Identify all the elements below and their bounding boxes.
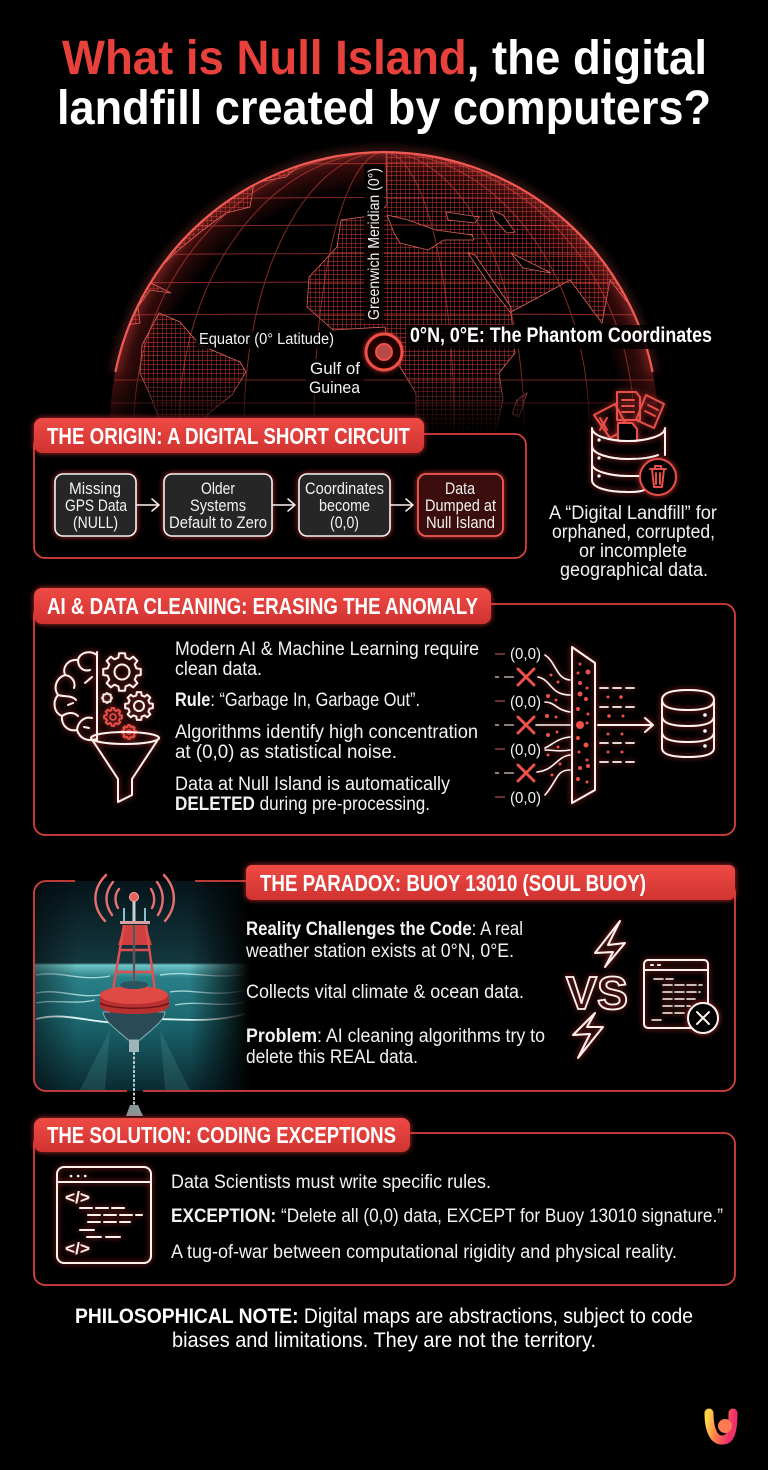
flow step 3 bbox=[299, 474, 390, 536]
null island target bbox=[366, 334, 402, 370]
text: paradox explanation: weather station exists at 0°N, 0°E. bbox=[245, 941, 514, 962]
heading: AI and data cleaning: AI & DATA CLEANING: ERASING THE ANOMALY bbox=[47, 593, 478, 619]
diagram: filter removing (0,0) points: (0,0) bbox=[510, 790, 541, 807]
heading: AI and data cleaning bbox=[34, 588, 491, 624]
text: AI cleaning explanation: DELETED during pre-processing. bbox=[175, 794, 430, 815]
panel: the solution bbox=[34, 1118, 735, 1285]
text: digital landfill description: A “Digital Landfill” for bbox=[549, 503, 718, 524]
flow step 4: Null Island bbox=[426, 513, 495, 532]
text: AI cleaning explanation: Rule: “Garbage In, Garbage Out”. bbox=[175, 690, 420, 711]
continents mesh bbox=[130, 153, 628, 432]
text: paradox explanation: delete this REAL data. bbox=[246, 1047, 418, 1068]
philosophical note: PHILOSOPHICAL NOTE: Digital maps are abstractions, subject to code bbox=[75, 1305, 693, 1328]
flow step 4: Data bbox=[445, 479, 475, 498]
illustration: soul buoy at sea bbox=[34, 875, 250, 1116]
diagram: filter removing (0,0) points: (0,0) bbox=[510, 646, 541, 663]
signal waves bbox=[95, 875, 174, 921]
flow step 1: GPS Data bbox=[65, 496, 127, 515]
graticule bbox=[111, 153, 657, 430]
arrow 3 bbox=[391, 499, 413, 511]
label: gulf of guinea: Guinea bbox=[309, 378, 360, 397]
panel: the paradox bbox=[34, 865, 735, 1116]
flow step 4 bbox=[418, 474, 503, 536]
icon: VS with lightning bolts: VS bbox=[566, 967, 628, 1019]
flow step 1: (NULL) bbox=[73, 513, 118, 532]
text: AI cleaning explanation: Algorithms identify high concentration bbox=[175, 722, 478, 743]
text: AI cleaning explanation: clean data. bbox=[175, 659, 262, 680]
icon: brain gears funnel bbox=[55, 652, 159, 802]
label: equator: Equator (0° Latitude) bbox=[199, 331, 334, 348]
diagram: filter removing (0,0) points: (0,0) bbox=[510, 694, 541, 711]
flow step 4: Dumped at bbox=[425, 496, 496, 515]
flow step 1: Missing bbox=[69, 479, 121, 498]
label: phantom coordinates: 0°N, 0°E: The Phantom Coordinates bbox=[410, 324, 712, 347]
text: solution explanation: A tug-of-war between computational rigidity and physical reality. bbox=[171, 1242, 677, 1263]
text: AI cleaning explanation bbox=[175, 639, 479, 815]
text: solution explanation bbox=[171, 1172, 723, 1263]
heading: the paradox: THE PARADOX: BUOY 13010 (SOUL BUOY) bbox=[260, 870, 646, 896]
globe with coordinate grid bbox=[108, 143, 660, 432]
text: digital landfill description bbox=[549, 503, 718, 581]
text: paradox explanation: Reality Challenges the Code: A real bbox=[246, 919, 523, 940]
text: digital landfill description: or incomplete bbox=[579, 541, 687, 562]
icon: code window: </> bbox=[65, 1239, 90, 1258]
flow step 3: become bbox=[319, 496, 370, 515]
buoy bbox=[100, 892, 169, 1116]
text: digital landfill description: geographical data. bbox=[560, 560, 708, 581]
title: What is Null Island, the digital bbox=[62, 32, 707, 85]
icon: VS with lightning bolts bbox=[566, 921, 628, 1058]
title bbox=[57, 32, 711, 135]
panel: the origin bbox=[34, 418, 526, 558]
philosophical note: biases and limitations. They are not the territory. bbox=[172, 1329, 596, 1352]
text: digital landfill description: orphaned, corrupted, bbox=[552, 522, 715, 543]
label: gulf of guinea bbox=[306, 359, 364, 397]
icon: digital landfill database bbox=[592, 392, 676, 495]
flow step 3: Coordinates bbox=[305, 479, 384, 498]
text: solution explanation: Data Scientists must write specific rules. bbox=[171, 1172, 491, 1193]
flow step 2 bbox=[164, 474, 272, 536]
heading: origin bbox=[34, 418, 424, 453]
logo bbox=[709, 1413, 733, 1440]
diagram: filter removing (0,0) points: (0,0) bbox=[510, 742, 541, 759]
heading: the solution bbox=[34, 1118, 410, 1152]
icon: code window: </> bbox=[65, 1188, 90, 1207]
heading: the solution: THE SOLUTION: CODING EXCEPTIONS bbox=[47, 1122, 396, 1148]
flow step 1 bbox=[55, 474, 136, 536]
arrow 1 bbox=[137, 499, 159, 511]
text: paradox explanation: Problem: AI cleaning algorithms try to bbox=[246, 1026, 545, 1047]
paradox panel border bbox=[34, 881, 735, 1091]
icon: code window bbox=[57, 1167, 151, 1263]
icon: code window with error bbox=[644, 960, 718, 1033]
text: paradox explanation: Collects vital climate & ocean data. bbox=[246, 982, 524, 1003]
flow step 2: Older bbox=[201, 479, 235, 498]
label: meridian: Greenwich Meridian (0°) bbox=[366, 168, 383, 320]
flow step 2: Systems bbox=[190, 496, 246, 515]
text: AI cleaning explanation: Data at Null Island is automatically bbox=[175, 774, 450, 795]
arrow 2 bbox=[273, 499, 295, 511]
text: paradox explanation bbox=[245, 919, 545, 1068]
text: AI cleaning explanation: Modern AI & Machine Learning require bbox=[175, 639, 479, 660]
flow step 3: (0,0) bbox=[330, 513, 359, 532]
label: gulf of guinea: Gulf of bbox=[310, 359, 360, 378]
heading: origin: THE ORIGIN: A DIGITAL SHORT CIRCUIT bbox=[47, 423, 410, 449]
philosophical note bbox=[75, 1305, 693, 1352]
panel: AI and data cleaning bbox=[34, 588, 735, 835]
diagram: filter removing (0,0) points bbox=[495, 646, 714, 807]
text: solution explanation: EXCEPTION: “Delete all (0,0) data, EXCEPT for Buoy 13010 signature.” bbox=[171, 1206, 723, 1227]
title: landfill created by computers? bbox=[57, 82, 711, 135]
flow step 2: Default to Zero bbox=[169, 513, 267, 532]
text: AI cleaning explanation: at (0,0) as statistical noise. bbox=[175, 742, 397, 763]
